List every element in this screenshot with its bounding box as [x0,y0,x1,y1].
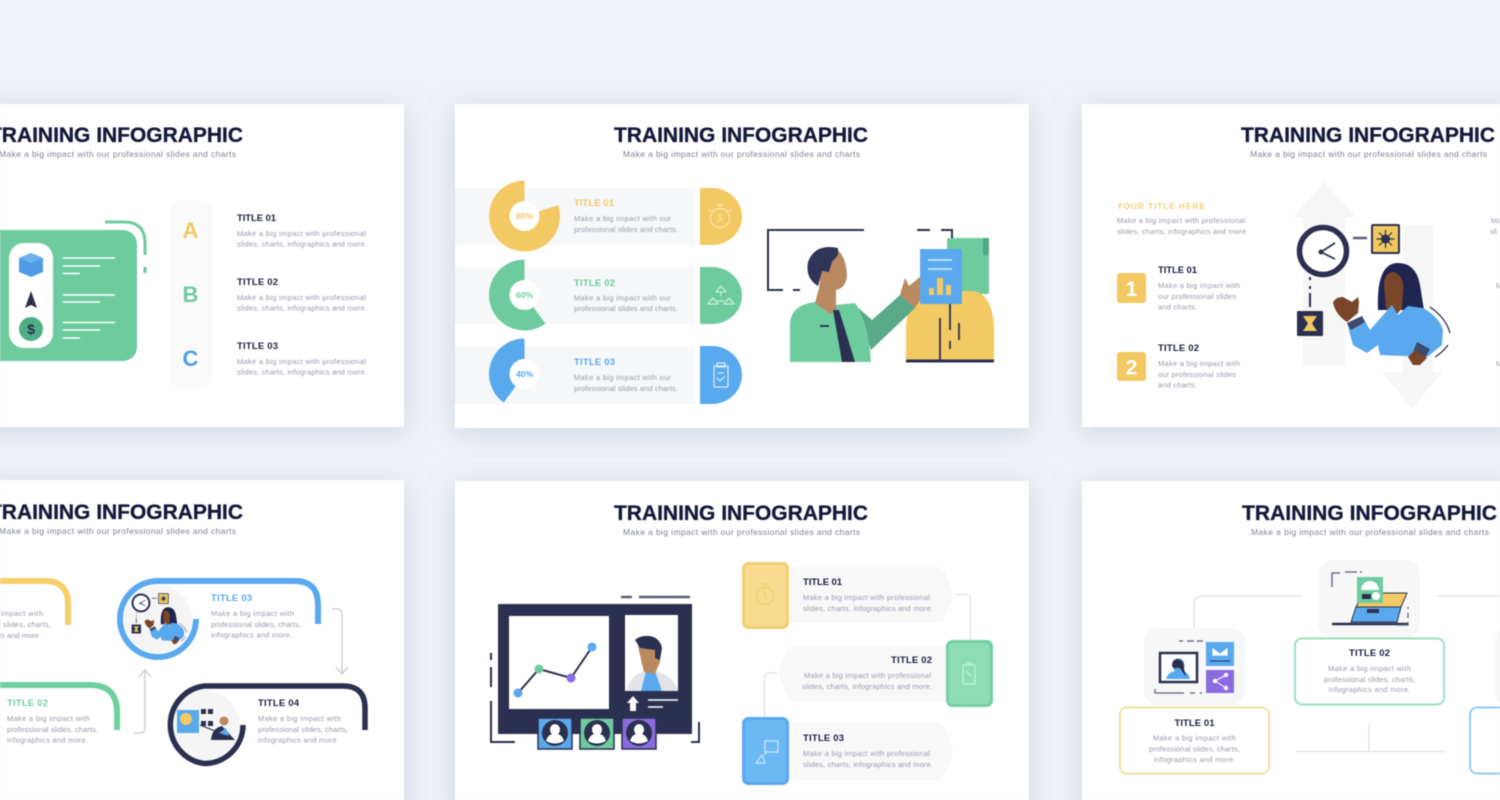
item: title 01 [744,564,952,628]
item: title 03: slides, charts, infographics and more. [803,760,933,769]
text block: title 01 [237,213,367,248]
text block: title 02: slides, charts, infographics and more. [237,304,367,312]
card: title 02: professional slides, charts, [1324,675,1415,684]
arrow: green to blue [134,670,151,733]
card: title 02: infographics and more. [1328,685,1410,694]
item 2: 2 [1126,356,1137,380]
row 01: Make a big impact with our [574,214,672,223]
step blue: infographics and more. [211,630,292,640]
text block: title 03: TITLE 03 [237,341,278,352]
text block: title 02 [237,277,367,312]
letter column [170,200,212,388]
text block: title 01: TITLE 01 [237,213,277,224]
intro text: slides, charts, infographics and more [1117,227,1246,236]
letter column: B [183,282,198,307]
card: title 02 [1295,638,1444,704]
item 2: and charts. [1158,380,1197,390]
row 01: professional slides and charts. [574,225,678,234]
step dark: Make a big impact with [258,714,341,723]
text block: title 02: Make a big impact with professional [237,293,366,302]
connector: 01 to 02 [956,594,970,640]
item: title 01: slides, charts, infographics and more. [803,604,933,613]
item: title 02: TITLE 02 [891,655,932,666]
row 01: TITLE 01 [574,198,615,209]
arrow up [1293,182,1357,365]
icon tile: video mail [1144,628,1245,705]
panel: slide org tree [1082,481,1500,800]
arrow down [1382,225,1443,408]
subtitle: Make a big impact with our professional slides and charts [623,527,860,537]
row 03: professional slides and charts. [574,384,678,393]
item 1: 1 [1126,278,1138,301]
text block: title 03: Make a big impact with professional [237,357,366,366]
item: title 03 [744,718,952,784]
row 02 [455,267,742,324]
text block: title 03: slides, charts, infographics and more. [237,368,367,376]
row 02: Make a big impact with our [574,294,672,302]
item: title 02: slides, charts, infographics and more. [802,682,932,691]
connector lines [1194,596,1500,752]
text block: title 02: TITLE 02 [237,277,278,288]
heading: TRAINING INFOGRAPHIC [1242,502,1497,525]
illustration: woman with clock [1297,225,1450,365]
item: title 01: Make a big impact with professional [803,593,930,602]
text block: title 01: slides, charts, infographics and more. [237,240,367,248]
panel: slide A B C [0,104,404,427]
item 1: Make a big impact with [1158,281,1240,290]
item: title 03: Make a big impact with professional [803,749,930,758]
item 1: our professional slides [1158,292,1236,301]
card: title 01 [1120,708,1269,774]
letter column: A [183,218,199,243]
heading: TRAINING INFOGRAPHIC [1241,124,1495,147]
clipped text at right: sli [1490,227,1497,236]
step yellow [0,581,68,640]
item 1: and charts. [1158,302,1197,312]
green card illustration: $ [27,321,35,337]
heading: TRAINING INFOGRAPHIC [614,124,868,147]
panel: slide monitor [455,481,1029,800]
card: title 01: professional slides, charts, [1149,744,1240,754]
item 2 [1117,343,1240,390]
row 02: professional slides and charts. [574,304,678,313]
row 01 [455,188,742,245]
text block: title 01: Make a big impact with professional [237,229,366,238]
row 01: $ [717,213,723,223]
step green: Make a big impact with [7,714,90,723]
card: title 03 clipped [1470,708,1500,774]
card: title 01: TITLE 01 [1174,718,1215,729]
subtitle: Make a big impact with our professional slides and charts [623,149,860,159]
intro text: YOUR TITLE HERE [1117,201,1205,211]
icon tile: right clipped [1495,628,1500,705]
row 02: 60% [516,290,533,300]
row 03: 40% [516,369,533,379]
card: title 01: infographics and more. [1154,755,1236,764]
panel: slide process [0,480,404,800]
step dark: professional slides, charts, [258,725,348,734]
card: title 02: Make a big impact with [1328,664,1411,673]
icon tile: laptop [1318,560,1420,638]
step dark: infographics and more. [258,736,339,744]
item: title 02: Make a big impact with professional [804,671,931,680]
item: title 03: TITLE 03 [803,733,844,744]
item 2: our professional slides [1158,370,1236,379]
connector: 02 to 03 [764,673,777,717]
subtitle: Make a big impact with our professional slides and charts [0,526,236,536]
item: title 02 [780,642,992,706]
step blue: Make a big impact with [211,609,294,618]
row 03: Make a big impact with our [574,373,672,382]
heading: TRAINING INFOGRAPHIC [614,502,868,525]
item 1 [1117,265,1240,312]
step green [0,685,117,744]
step green: professional slides, charts, [7,725,98,734]
row 03: TITLE 03 [574,357,615,368]
row 01: 80% [516,211,533,221]
clipped text at right [1490,216,1500,368]
card: title 02: TITLE 02 [1349,648,1390,659]
item: title 01: TITLE 01 [803,577,843,588]
step green: TITLE 02 [7,698,48,709]
item 2: Make a big impact with [1158,359,1240,368]
panel: slide clock woman [1082,104,1500,427]
arrow: blue to dark [332,609,348,674]
subtitle: Make a big impact with our professional slides and charts [0,149,236,159]
illustration: presenter [768,230,994,362]
row 03 [455,346,742,404]
step green: infographics and more. [7,736,88,744]
intro text [1117,201,1246,236]
step yellow: ts and more. [0,631,41,640]
step dark: TITLE 04 [258,698,300,709]
subtitle: Make a big impact with our professional slides and charts [1251,527,1489,537]
card: title 01: Make a big impact with [1153,734,1236,742]
panel: slide donuts [455,104,1029,428]
green card illustration [0,222,145,361]
step yellow: l slides, charts, [0,620,51,629]
subtitle: Make a big impact with our professional slides and charts [1250,149,1487,159]
text block: title 03 [237,341,367,376]
intro text: Make a big impact with professional [1117,216,1245,225]
item 2: TITLE 02 [1158,343,1199,354]
step yellow: impact with [1,609,43,618]
letter column: C [183,346,199,371]
row 02: TITLE 02 [574,278,615,289]
step blue: professional slides, charts, [211,620,301,629]
illustration: video call monitor [491,597,699,749]
step blue [120,581,318,657]
step blue: TITLE 03 [211,593,252,604]
item 1: TITLE 01 [1158,265,1198,276]
step dark [170,686,365,764]
